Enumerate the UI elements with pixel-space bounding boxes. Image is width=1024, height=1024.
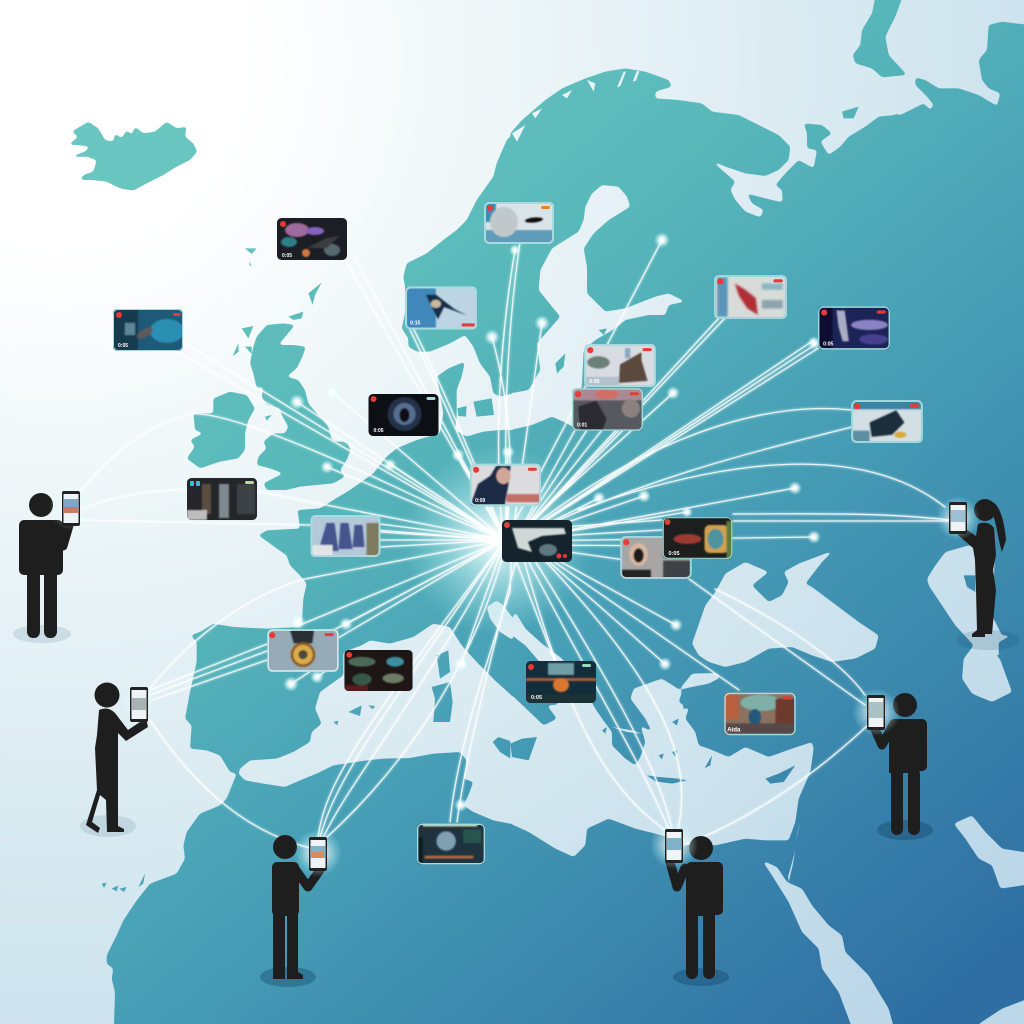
glow at the central network hub [402,445,592,635]
video card: dark orange and teal mural [662,517,732,559]
Norway and Sweden [402,133,513,397]
landmass: southern Europe, Africa and the Middle East [0,512,1024,1024]
Persian Gulf [954,815,1024,889]
video card: street painting: Aida [727,726,741,733]
video card: sunset corridor [526,661,596,703]
eastern Mediterranean, Black Sea, Caspian Sea, Red Sea and Persian Gulf [510,545,1024,1024]
Atlantic Ocean and western Mediterranean [0,510,513,1024]
video card: grey city scene [572,388,643,431]
Arabian Sea corner [979,992,1024,1024]
video card: globe in a room [417,824,485,864]
person: man with phone, south [650,821,729,986]
Iceland [68,122,197,191]
video card: street painting [724,692,796,736]
Sea of Marmara [679,673,720,690]
video card: black radial scene: 0:05 [374,428,384,434]
video card: pale snow scene [484,202,554,244]
Great Britain [250,323,351,490]
person: man walking with phone [80,682,159,837]
video card: grey portrait mural [620,536,692,579]
video card: blue sky scene [405,286,477,330]
video card: red splash scene [714,275,787,319]
network node dots [283,232,821,812]
video card: pale rubble scene [584,344,656,387]
Ionian and Aegean seas [510,679,814,857]
video card: dark hall with windows [187,478,257,520]
video card: dark green specks [344,650,413,691]
Gulf of Corinth and Suez slivers [612,727,800,882]
video card: dark orange and teal mural: 0:05 [668,551,680,557]
video card: black radial scene [368,394,438,436]
video card: blue glass scene: 0:05 [118,343,128,349]
Red Sea [762,860,899,1024]
video card: woman in wind [470,464,541,506]
fjord details [512,71,639,142]
video card: grey city scene: 0:01 [577,423,587,429]
Adriatic Sea, western part [487,600,513,640]
Danish islands [457,398,494,417]
person: man with phone, south-east [852,688,933,840]
small islands and fjords in the north [512,71,859,373]
video card: central hub scene [502,520,572,562]
landmass: Finland, Russia and eastern Europe [510,0,1024,533]
video card: blue glass scene [113,309,183,351]
Caspian Sea [927,545,1012,702]
person: man with phone, left [13,486,93,643]
video card: pale rubble scene: 0:05 [589,379,600,385]
video card: bright wreck scene [851,400,923,443]
video card: colourful night scene [277,218,347,260]
video card: golden ring scene [267,629,339,672]
network connection lines [80,240,950,848]
video card: sunset corridor: 0:05 [531,695,542,701]
Adriatic Sea, eastern part [510,612,595,709]
Ireland [187,392,255,468]
video card: colourful night scene: 0:05 [282,253,292,259]
person: woman with phone and ponytail [936,496,1020,650]
landmass: north-west Europe and large islands [68,122,513,513]
north Germany, Benelux and Denmark [295,362,513,513]
Corsica, Sardinia, Sicily, Balearics and Canaries [102,650,513,892]
Black Sea [692,550,879,667]
video card: purple figure scene: 0:05 [823,341,834,347]
video card: blue sky scene: 0:15 [410,320,421,326]
Novaya Zemlya peninsula [853,0,909,77]
video card: pale blue figures [310,515,380,557]
small northern islands [233,248,494,421]
video card: woman in wind: 0:09 [475,498,485,504]
person: man with phone, south-west [260,829,342,987]
Aegean islands, Crete, Cyprus, Sicily and narrow gulfs [510,575,1012,882]
video card: purple figure scene [818,306,890,350]
